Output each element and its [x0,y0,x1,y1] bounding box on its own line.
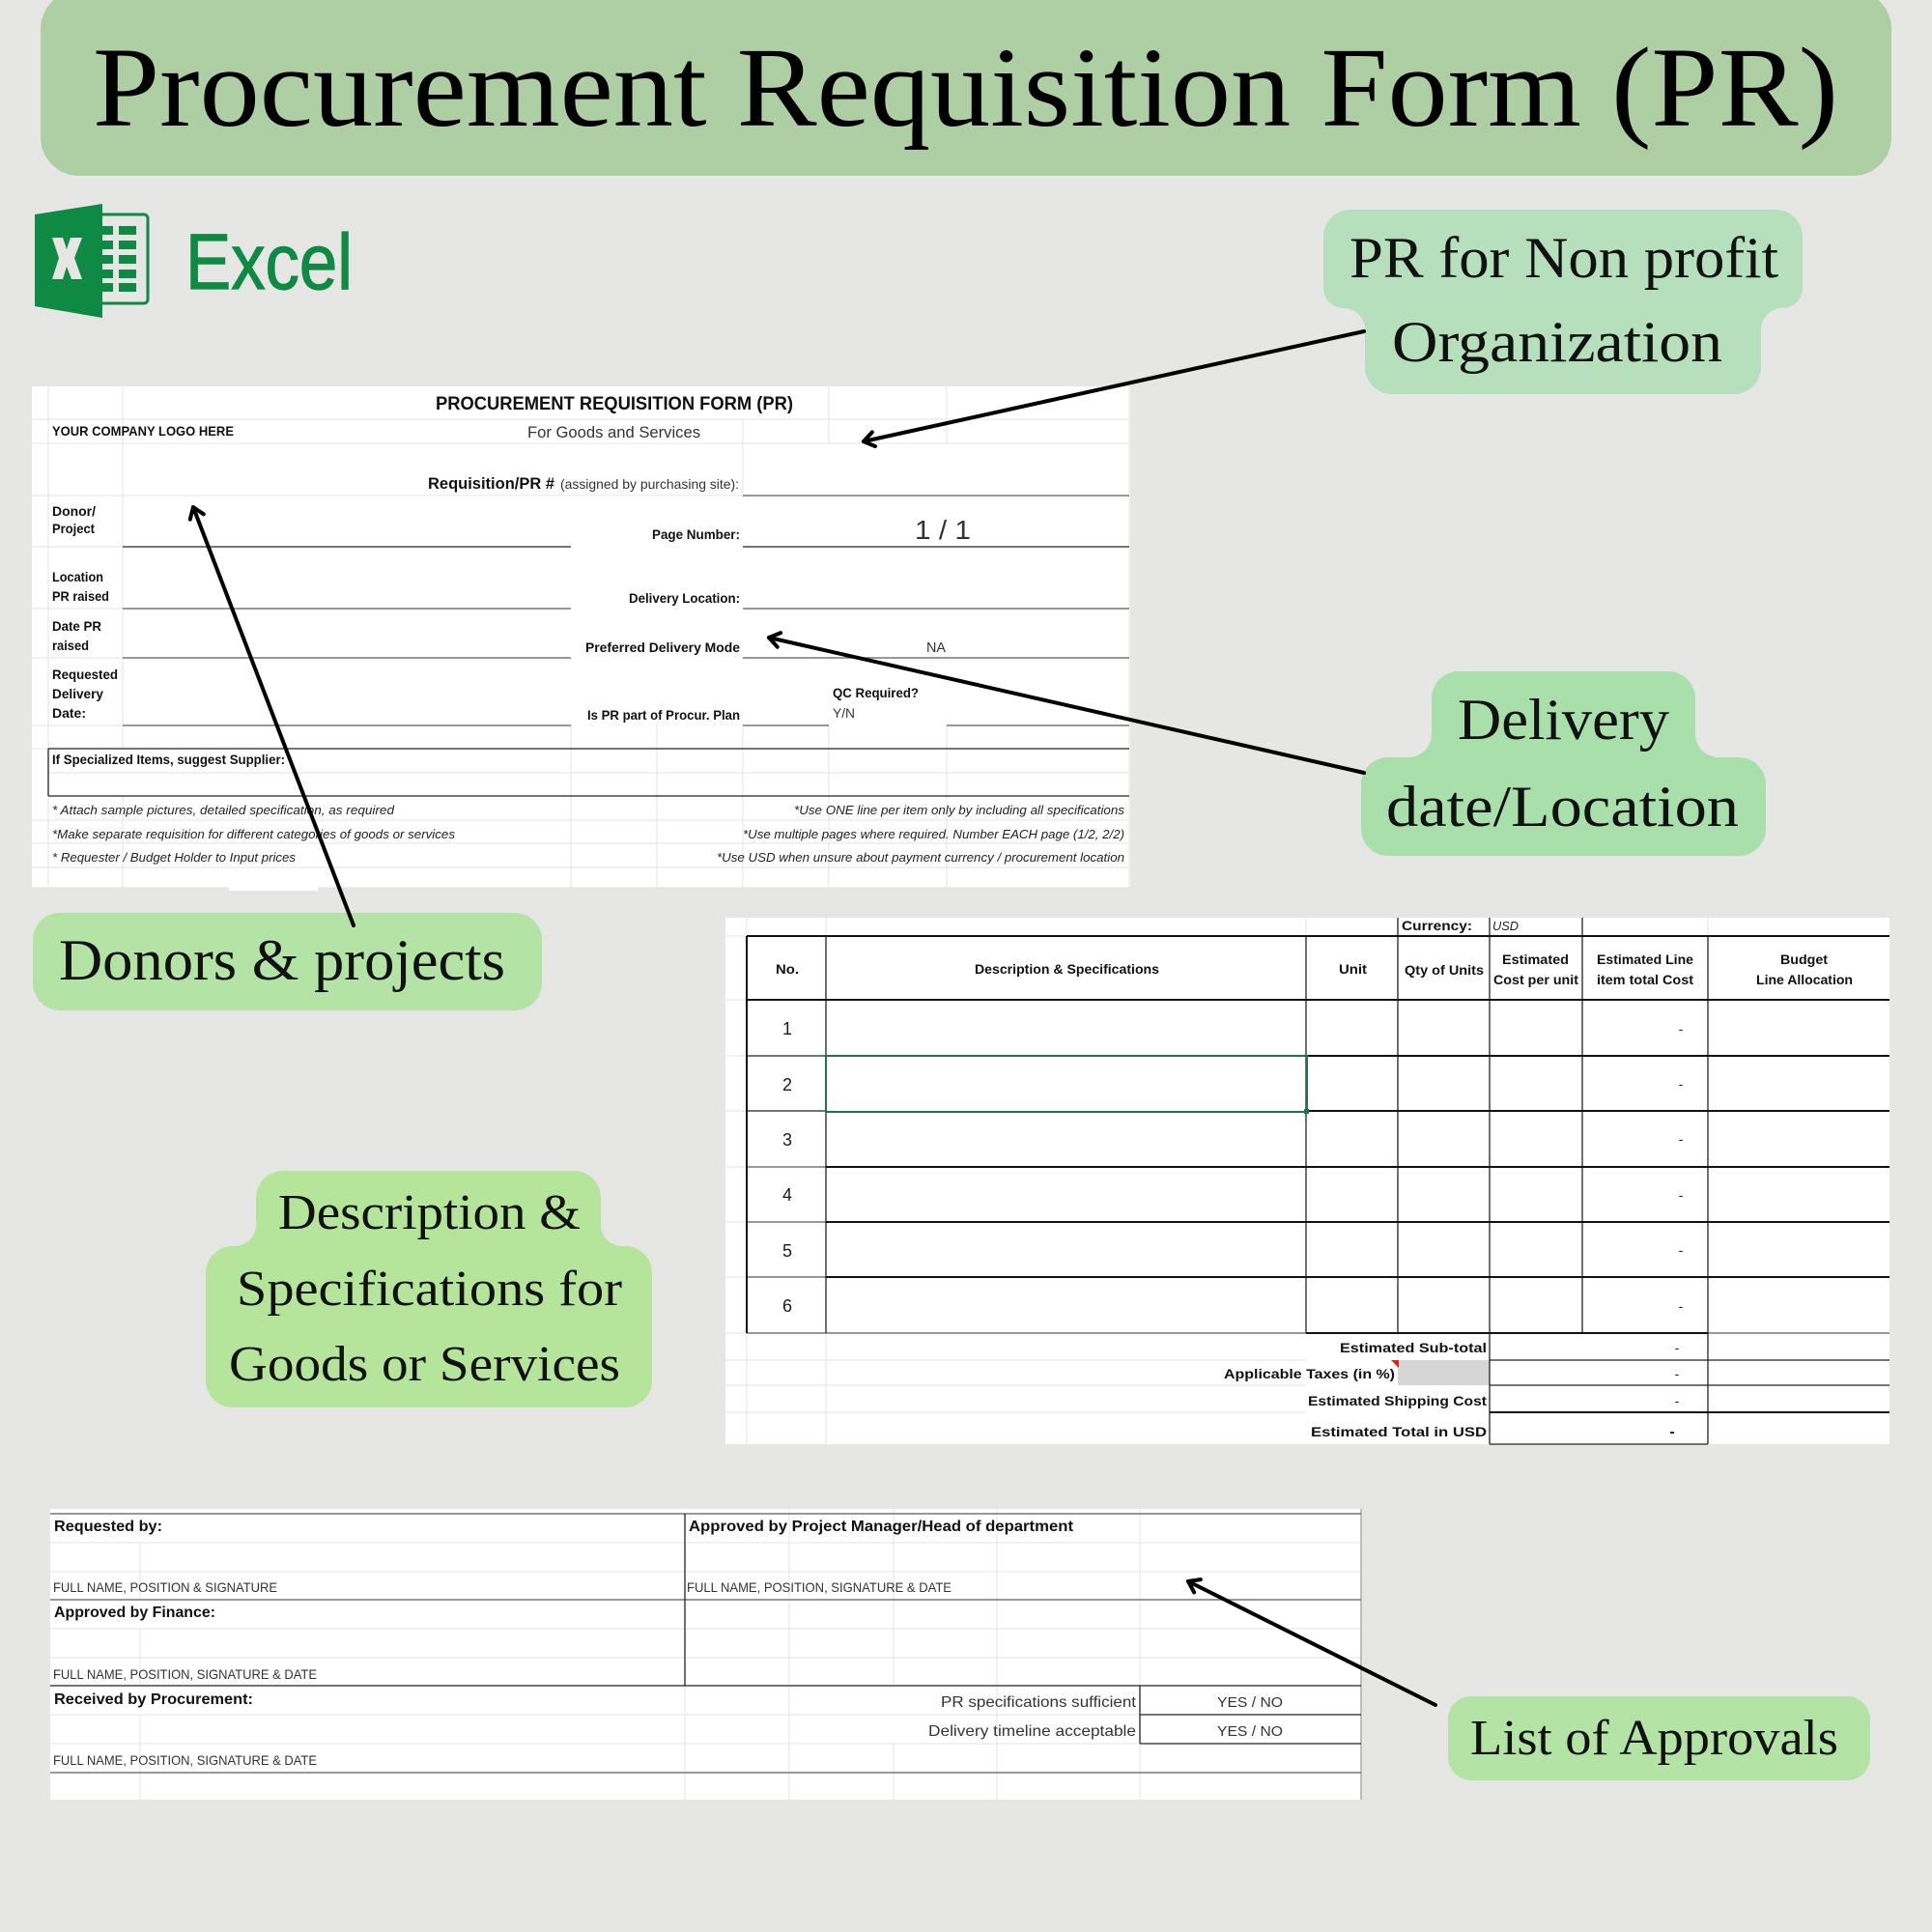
form header fields: 1 / 1 [915,515,971,545]
form header fields: If Specialized Items, suggest Supplier: [52,752,285,767]
callout: PR for Non profit Organization: PR for Non profit [1350,226,1778,290]
table totals: - [1669,1424,1675,1440]
row numbers and dashes: 4 [782,1185,792,1205]
table header labels: Line Allocation [1756,972,1853,987]
row numbers and dashes: 1 [782,1019,792,1038]
table totals: Estimated Sub-total [1340,1340,1487,1355]
table header labels: item total Cost [1597,972,1693,987]
approvals labels: FULL NAME, POSITION & SIGNATURE [53,1579,277,1595]
table header labels: Estimated Line [1597,952,1693,967]
title banner: Procurement Requisition Form (PR) [93,24,1838,151]
row numbers and dashes: - [1679,1131,1684,1147]
table header labels: Unit [1339,961,1367,977]
arrow: approvals to approvals table [1188,1579,1435,1705]
panel: approvals table [50,1509,1362,1800]
callout: List of Approvals [1448,1696,1870,1780]
form header fields: Delivery Location: [629,590,740,606]
form notes: *Use multiple pages where required. Number EACH page (1/2, 2/2) [743,827,1124,841]
callout: Description & Specifications for Goods or Services: Goods or Services [229,1337,620,1392]
form notes: * Attach sample pictures, detailed specification, as required [52,803,395,817]
approvals labels: Delivery timeline acceptable [928,1723,1136,1740]
approvals labels: Received by Procurement: [54,1691,253,1708]
row numbers and dashes: - [1679,1021,1684,1037]
table totals: Estimated Shipping Cost [1308,1393,1487,1408]
row numbers and dashes: 6 [782,1296,792,1316]
row numbers and dashes: 2 [782,1075,792,1094]
icon: Excel logo [35,204,353,318]
table totals: - [1675,1393,1680,1408]
form header fields [52,423,971,767]
callout: Delivery date/Location: date/Location [1386,775,1739,838]
table totals: - [1675,1366,1680,1381]
table header labels: Cost per unit [1493,972,1578,987]
callout: PR for Non profit Organization: Organization [1392,310,1722,374]
approvals labels: FULL NAME, POSITION, SIGNATURE & DATE [687,1579,952,1595]
form header fields: NA [926,639,946,656]
approvals labels: YES / NO [1217,1723,1283,1740]
table header labels: Description & Specifications [975,961,1159,977]
panel: form header spreadsheet [32,386,1130,891]
form header fields: QC Required? [833,685,919,700]
approvals labels: Approved by Project Manager/Head of department [689,1519,1074,1535]
form header fields: Donor/ [52,503,96,519]
callout: Donors & projects [33,913,542,1010]
form header fields: YOUR COMPANY LOGO HERE [52,423,234,439]
table header labels: USD [1492,919,1519,933]
table header labels: Estimated [1502,952,1569,967]
form header fields: Preferred Delivery Mode [585,639,740,655]
form header fields: (assigned by purchasing site): [560,476,739,492]
title banner [41,0,1891,176]
form header fields: Date PR [52,618,101,634]
arrow: delivery to delivery fields [769,633,1364,773]
table header labels: Qty of Units [1405,962,1484,978]
callout: Donors & projects: Donors & projects [59,928,505,992]
form header fields: Location [52,569,103,584]
approvals labels: FULL NAME, POSITION, SIGNATURE & DATE [53,1752,317,1768]
row numbers and dashes [782,1019,1684,1316]
approvals labels: Requested by: [54,1519,162,1535]
row numbers and dashes: - [1679,1242,1684,1258]
selected cell [826,1056,1309,1114]
form notes: * Requester / Budget Holder to Input prices [52,850,296,865]
form header fields: Requisition/PR # [428,474,555,493]
form header fields: Is PR part of Procur. Plan [587,707,740,723]
row numbers and dashes: 5 [782,1241,792,1261]
form header fields: Y/N [833,705,855,721]
table totals: Estimated Total in USD [1311,1424,1487,1439]
form header fields: PR raised [52,588,109,604]
table totals [1224,1340,1680,1440]
approvals labels: YES / NO [1217,1694,1283,1711]
form notes: *Use USD when unsure about payment currency / procurement location [717,850,1124,865]
approvals labels: Approved by Finance: [54,1605,215,1621]
callout: Delivery date/Location: Delivery [1458,688,1669,752]
icon: Excel logo: Excel [185,218,353,306]
form title text: PROCUREMENT REQUISITION FORM (PR) [436,394,793,414]
table header labels [776,918,1853,987]
form header fields: Date: [52,705,86,721]
form header fields: raised [52,638,89,653]
row numbers and dashes: - [1679,1187,1684,1203]
row numbers and dashes: - [1679,1298,1684,1314]
table totals: - [1675,1340,1680,1355]
row numbers and dashes: - [1679,1076,1684,1092]
table header labels: Budget [1780,952,1828,967]
callout: Delivery date/Location [1361,671,1766,856]
table totals: Applicable Taxes (in %) [1224,1366,1395,1381]
form notes: *Use ONE line per item only by including all specifications [794,803,1124,817]
callout: Description & Specifications for Goods or Services: Description & [278,1185,581,1240]
form header fields: Page Number: [652,526,740,542]
table header labels: No. [776,961,799,977]
approvals labels: FULL NAME, POSITION, SIGNATURE & DATE [53,1666,317,1682]
form header fields: For Goods and Services [527,423,700,441]
panel: line items table [725,918,1889,1444]
form header fields: Requested [52,667,118,682]
approvals labels: PR specifications sufficient [941,1694,1137,1711]
form notes: *Make separate requisition for different categories of goods or services [52,827,456,841]
arrow: non profit to form header [864,331,1364,446]
row numbers and dashes: 3 [782,1130,792,1150]
table header labels: Currency: [1402,918,1472,933]
callout: Description & Specifications for Goods or Services: Specifications for [237,1262,622,1317]
arrow: donors to donor field [190,507,354,925]
callout: List of Approvals: List of Approvals [1470,1711,1838,1766]
approvals labels [53,1519,1283,1768]
form header fields: Project [52,521,95,536]
callout: Description & Specifications for Goods or Services [206,1171,652,1407]
callout: PR for Non profit Organization [1323,210,1803,394]
form notes [52,803,1124,865]
form header fields: Delivery [52,686,103,701]
